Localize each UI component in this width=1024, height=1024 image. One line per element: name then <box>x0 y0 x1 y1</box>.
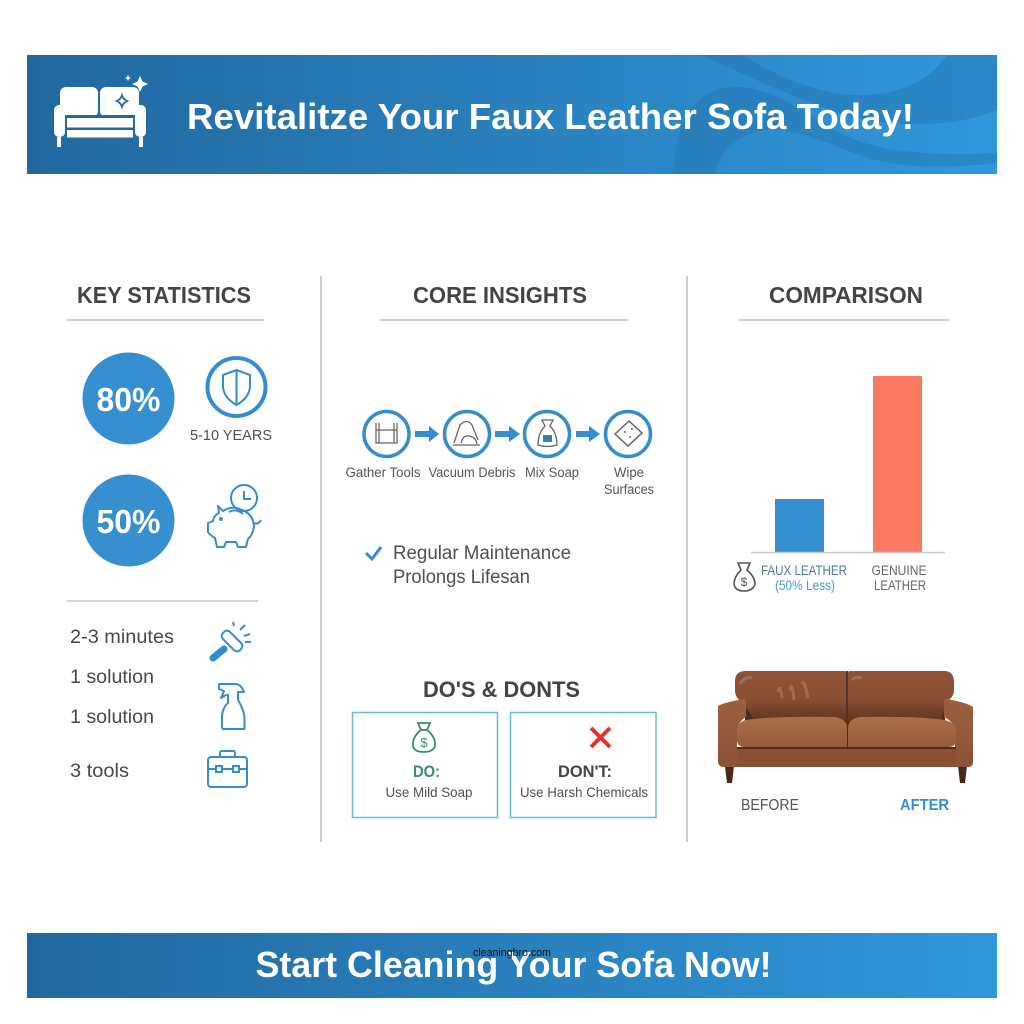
card: don't: Use Harsh Chemicals <box>520 784 648 800</box>
bar chart: LEATHER <box>874 578 926 593</box>
panel: comparison <box>718 282 973 814</box>
card: do <box>352 712 498 818</box>
stat: 3 tools: 3 tools <box>70 761 129 782</box>
heading: key statistics: KEY STATISTICS <box>77 282 251 308</box>
title: Revitalitze Your Faux Leather Sofa Today! <box>187 96 914 137</box>
insight text: Prolongs Lifesan <box>393 567 530 588</box>
icon: brush <box>213 622 251 658</box>
card: do: DO: <box>413 762 440 781</box>
arrow <box>495 426 520 442</box>
icon: money bag <box>734 563 755 591</box>
base and seat cushions <box>737 747 956 767</box>
card: don't: DON'T: <box>558 762 612 781</box>
stat: 1 solution: 1 solution <box>70 707 154 728</box>
heading: core insights: CORE INSIGHTS <box>413 282 587 308</box>
bar chart <box>734 376 945 593</box>
insight text: Regular Maintenance <box>393 543 571 564</box>
label: before: BEFORE <box>741 797 799 814</box>
stat: 2-3 minutes: 2-3 minutes <box>70 627 174 648</box>
arms <box>718 699 746 767</box>
icon: sofa with sparkles <box>54 75 148 147</box>
icon: piggy bank and clock <box>208 485 261 547</box>
stat: 80% circle: 80% <box>96 381 160 418</box>
card: don't <box>510 712 656 818</box>
icon: money bag <box>413 723 435 752</box>
label: after: AFTER <box>900 797 949 814</box>
step: vacuum debris: Vacuum Debris <box>428 465 516 480</box>
sofa illustration <box>718 671 973 783</box>
bar chart: (50% Less) <box>775 578 835 593</box>
panel: core insights <box>346 282 656 818</box>
icon: money bag: $ <box>420 735 428 750</box>
bar chart: GENUINE <box>872 563 926 578</box>
icon: red cross <box>591 728 610 747</box>
stat: 1 solution: 1 solution <box>70 667 154 688</box>
legs <box>725 766 734 783</box>
panel: key statistics <box>67 282 272 787</box>
process flow <box>346 412 654 497</box>
icon: spray bottle <box>219 684 245 729</box>
label: 5-10 years: 5-10 YEARS <box>190 427 272 444</box>
watermark: cleaningbro.com <box>473 947 551 959</box>
column dividers <box>321 276 687 842</box>
arrow <box>576 426 600 442</box>
icon: money bag: $ <box>741 575 748 589</box>
heading: do's and donts: DO'S & DONTS <box>423 677 580 702</box>
insight text <box>393 543 571 588</box>
step: gather tools: Gather Tools <box>346 465 421 480</box>
step: wipe surfaces <box>604 412 654 497</box>
icon: toolbox <box>208 751 247 787</box>
stat: 50% circle: 50% <box>96 503 160 540</box>
stat: 80% circle <box>82 352 174 444</box>
card: do: Use Mild Soap <box>386 784 473 800</box>
stat: 50% circle <box>82 474 174 566</box>
step: gather tools <box>346 412 421 480</box>
step: mix soap: Mix Soap <box>525 465 579 480</box>
step: wipe surfaces: Surfaces <box>604 482 654 497</box>
bar chart: FAUX LEATHER <box>761 563 847 578</box>
step: wipe surfaces: Wipe <box>614 465 644 480</box>
icon: shield <box>208 358 266 416</box>
step: mix soap <box>524 412 579 480</box>
back cushions <box>745 700 945 747</box>
footer banner <box>27 933 997 998</box>
header banner <box>27 55 997 174</box>
icon: check mark <box>366 547 381 559</box>
heading: comparison: COMPARISON <box>769 282 923 308</box>
arrow <box>415 426 439 442</box>
step: vacuum debris <box>428 412 516 480</box>
footer call to action: Start Cleaning Your Sofa Now! <box>256 944 772 985</box>
